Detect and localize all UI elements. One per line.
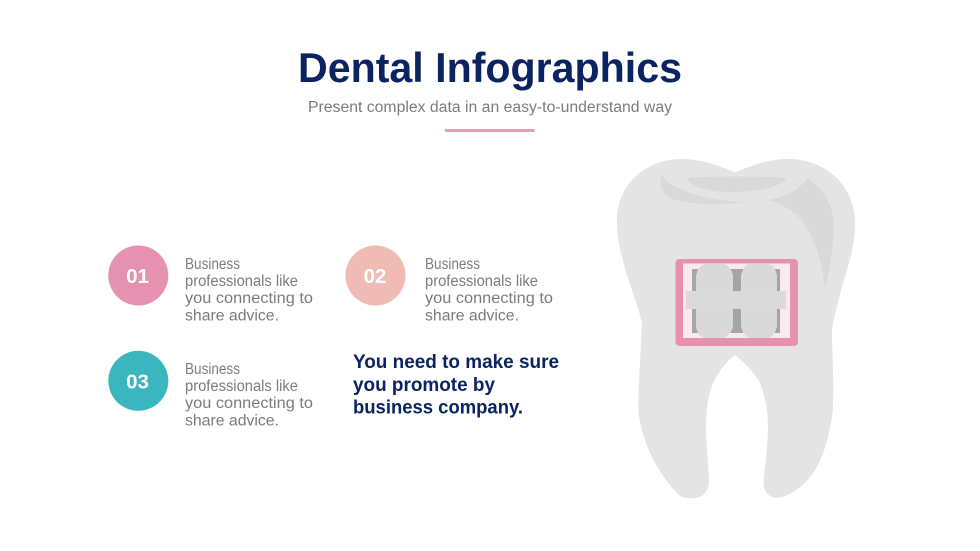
- bracket pad right: [741, 264, 777, 338]
- badge 01: 01: [126, 265, 149, 288]
- icon: tooth with brace: [617, 159, 855, 498]
- callout text: business company.: [353, 396, 523, 418]
- badge 02: [346, 246, 406, 306]
- item 03 text: share advice.: [185, 412, 279, 430]
- brace inner: [683, 264, 790, 338]
- badge 02: 02: [364, 265, 386, 288]
- item 01: [108, 246, 313, 324]
- callout text: You need to make sure: [353, 351, 559, 373]
- item 02 text: [425, 256, 553, 324]
- item 01 text: Business: [185, 256, 240, 273]
- item 01 text: you connecting to: [185, 290, 313, 307]
- item 02 text: professionals like: [425, 273, 538, 290]
- callout text: [353, 351, 559, 418]
- item 02 text: you connecting to: [425, 290, 553, 307]
- item 03 text: professionals like: [185, 378, 298, 395]
- item 01 text: professionals like: [185, 273, 298, 290]
- bracket pad left: [696, 264, 733, 338]
- tooth body: [617, 159, 855, 498]
- item 01 text: share advice.: [185, 308, 279, 324]
- accent underline: [445, 129, 534, 132]
- left crease shadow: [660, 175, 745, 204]
- item 02: [346, 246, 553, 324]
- badge 03: [108, 351, 168, 411]
- right crease shadow: [768, 178, 834, 288]
- item 03 text: Business: [185, 361, 240, 378]
- badge 03: 03: [126, 370, 149, 394]
- callout text: you promote by: [353, 374, 495, 396]
- wire: [686, 291, 786, 309]
- crown groove: [686, 176, 787, 192]
- title: Dental Infographics: [298, 44, 682, 91]
- badge 01: [108, 246, 168, 306]
- brace frame: [676, 259, 798, 346]
- item 03: [108, 351, 313, 430]
- item 03 text: [185, 361, 313, 430]
- item 02 text: Business: [425, 256, 480, 273]
- bracket shadow: [692, 269, 780, 333]
- item 03 text: you connecting to: [185, 395, 313, 412]
- item 01 text: [185, 256, 313, 324]
- subtitle: Present complex data in an easy-to-understand way: [308, 99, 672, 116]
- item 02 text: share advice.: [425, 308, 519, 324]
